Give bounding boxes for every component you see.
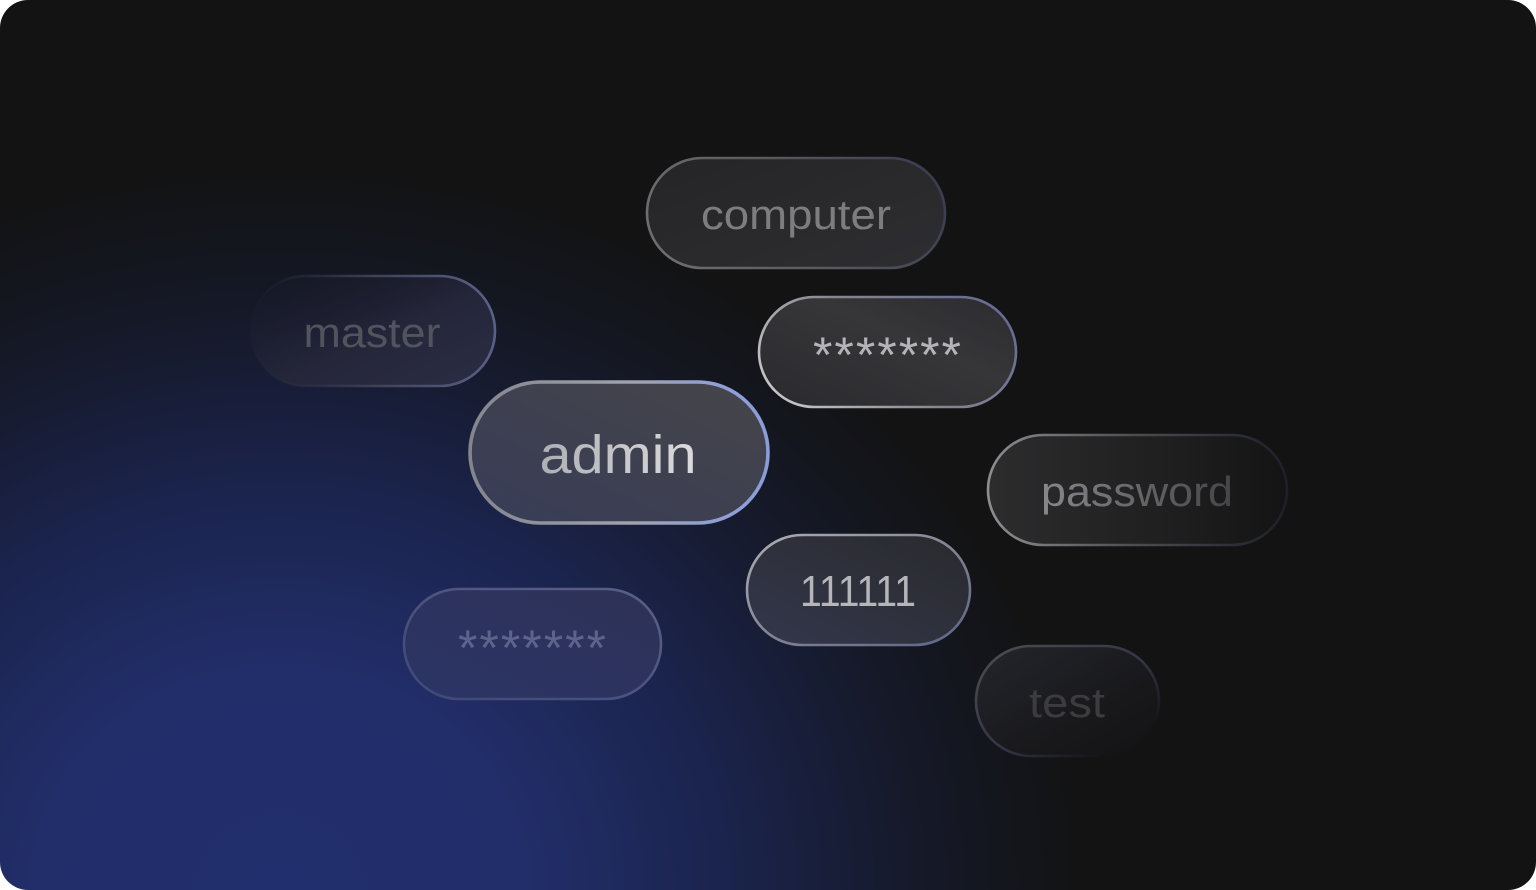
pill: password: password xyxy=(1041,468,1233,515)
pill: computer xyxy=(647,158,945,268)
pill: masked password, upper: ******* xyxy=(813,327,961,383)
pill: test xyxy=(976,646,1159,756)
pill: admin: admin xyxy=(540,425,696,485)
pill: masked password, lower: ******* xyxy=(458,620,606,676)
pill: admin xyxy=(470,382,768,523)
pill: test: test xyxy=(1029,679,1105,726)
pill: computer: computer xyxy=(701,191,891,238)
pill: 111111 xyxy=(747,535,970,645)
pill: master: master xyxy=(304,309,441,356)
pill: masked password, lower xyxy=(404,589,661,699)
pill: password xyxy=(988,435,1287,545)
pill: 111111: 111111 xyxy=(800,567,916,616)
pill: master xyxy=(250,276,495,386)
pill: masked password, upper xyxy=(759,297,1016,407)
